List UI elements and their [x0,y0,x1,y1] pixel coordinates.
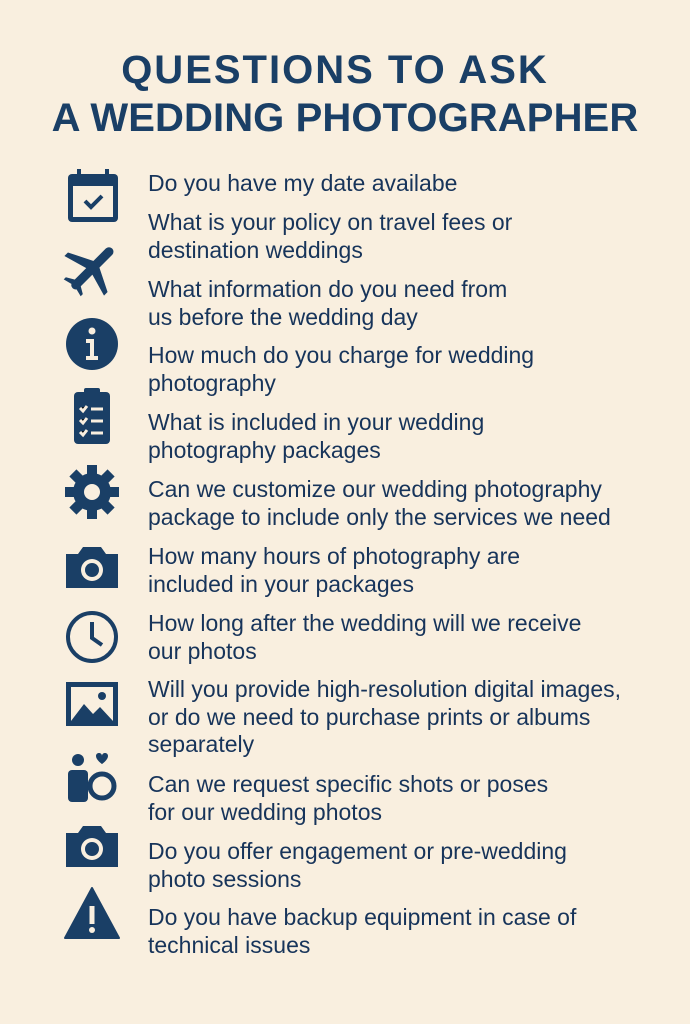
icon: gear [65,465,119,519]
q5 [148,409,484,463]
q12: Do you have backup equipment in case of [148,904,576,930]
q11 [148,838,567,892]
q7: included in your packages [148,570,414,596]
q9: Will you provide high-resolution digital images, [148,676,621,702]
q5: What is included in your wedding [148,409,484,435]
q7: How many hours of photography are [148,543,520,569]
q1: Do you have my date availabe [148,170,457,196]
q4 [148,342,534,396]
icon: camera [66,547,118,588]
q10 [148,771,548,825]
q10: Can we request specific shots or poses [148,771,548,797]
q10: for our wedding photos [148,798,382,824]
q4: How much do you charge for wedding [148,342,534,368]
icon: clock [66,611,118,663]
q4: photography [148,370,276,396]
q2: destination weddings [148,236,363,262]
icon: calendar [68,169,118,222]
q8 [148,610,581,664]
q3: us before the wedding day [148,304,418,330]
title: QUESTIONS TO ASK [121,48,549,92]
q6: Can we customize our wedding photography [148,476,602,502]
q8: How long after the wedding will we receive [148,610,581,636]
q8: our photos [148,638,257,664]
q7 [148,543,520,597]
icon: warning [64,887,120,939]
title [52,48,638,140]
q11: photo sessions [148,866,301,892]
q3 [148,276,507,330]
icon: info [66,318,118,370]
icon: couple [68,753,116,802]
q12: technical issues [148,932,310,958]
q12 [148,904,576,958]
icon: plane [64,247,114,296]
icon: image [66,682,118,726]
q5: photography packages [148,436,381,462]
icon: camera 2 [66,826,118,867]
q9 [148,676,621,757]
q2: What is your policy on travel fees or [148,209,512,235]
q6 [148,476,611,530]
q2 [148,209,512,263]
q9: separately [148,731,254,757]
icon: clipboard [74,388,110,444]
q9: or do we need to purchase prints or albums [148,704,590,730]
q11: Do you offer engagement or pre-wedding [148,838,567,864]
q6: package to include only the services we need [148,504,611,530]
q3: What information do you need from [148,276,507,302]
title: A WEDDING PHOTOGRAPHER [52,96,638,140]
